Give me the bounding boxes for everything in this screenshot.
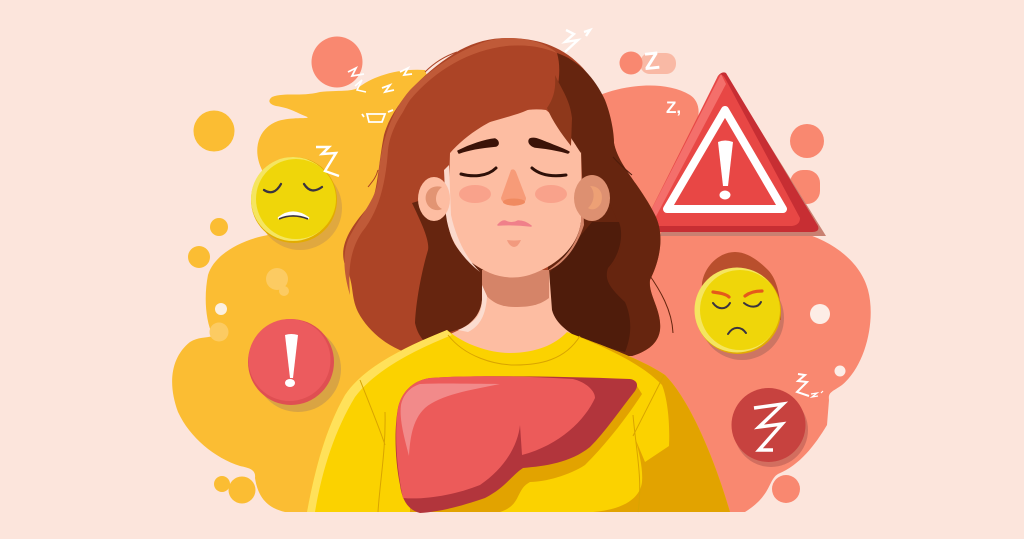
open box doodle	[367, 114, 385, 122]
cheek left	[459, 185, 491, 203]
circle: coral top left	[312, 36, 362, 88]
liver dark base	[396, 376, 637, 513]
hair: right dark side	[550, 53, 660, 356]
hair fringe	[384, 46, 558, 200]
zigzag z mark	[754, 404, 783, 450]
triangle inner outline	[667, 110, 783, 209]
collar stitch	[448, 335, 580, 365]
emoji mouth	[728, 328, 746, 334]
liver	[396, 376, 642, 513]
sleeve seams	[360, 375, 664, 512]
dots: pale highlights on yellow blob	[210, 268, 289, 342]
emoji mouth	[279, 213, 308, 218]
nose	[501, 169, 526, 206]
dots: white on coral blob	[810, 304, 846, 376]
badge: exclamation	[248, 319, 341, 412]
chin	[507, 240, 521, 247]
circle: yellow upper left	[194, 110, 234, 152]
letter Z top right: Z	[643, 47, 661, 76]
liver shadow	[410, 386, 642, 512]
eyebrow left	[458, 139, 498, 153]
triangle shadow	[660, 78, 826, 236]
hair back	[343, 38, 660, 356]
emoji: frowning with hair	[694, 252, 784, 360]
blob: coral background	[600, 86, 871, 512]
circle: yellow small lower	[188, 246, 210, 268]
liver main lobe	[396, 376, 595, 498]
face	[444, 109, 584, 277]
eye right	[532, 168, 566, 176]
badge shadow	[734, 393, 808, 467]
emoji eyes	[264, 184, 322, 192]
badge circle	[248, 319, 334, 405]
liver highlight	[401, 384, 500, 456]
neck shadow	[482, 270, 549, 307]
emoji face	[695, 268, 781, 354]
hair: left highlight edge	[344, 38, 557, 295]
hair fringe right	[547, 75, 572, 146]
sleep marks: top left	[348, 68, 412, 122]
cheek right	[535, 185, 567, 203]
emoji brows	[713, 291, 762, 297]
face side highlight	[444, 165, 480, 272]
ear right	[574, 175, 610, 221]
warning triangle	[645, 72, 826, 236]
zigzag: sleep mark near left emoji	[316, 147, 339, 176]
badge: sleep z	[732, 388, 808, 467]
exclamation mark	[285, 334, 298, 387]
circle: yellow small	[210, 218, 228, 236]
circles: coral right of triangle	[790, 124, 824, 204]
letter Z by triangle: Z,	[666, 98, 681, 117]
eye left	[461, 168, 496, 176]
eyebrow right	[529, 138, 569, 153]
shirt	[307, 330, 730, 512]
circles: yellow bottom pair	[214, 476, 256, 504]
emoji eyes	[713, 302, 761, 308]
badge circle	[732, 388, 806, 462]
emoji shadow	[700, 276, 784, 360]
triangle body	[645, 72, 818, 232]
emoji hair	[700, 252, 781, 320]
mouth	[498, 221, 531, 226]
circle: coral bottom right	[772, 475, 800, 503]
hair strands	[368, 52, 673, 333]
hair: inner shadow	[412, 195, 629, 352]
zigzag: sleep marks above badge	[797, 374, 823, 397]
emoji face	[251, 157, 337, 243]
shirt body	[307, 330, 730, 512]
badge shadow	[255, 326, 341, 412]
ear left	[418, 177, 450, 221]
zigzag: sleep mark top centre	[565, 30, 590, 52]
blob: yellow background	[172, 70, 470, 512]
circle: coral top right pair	[620, 52, 676, 74]
shirt shaded right side	[567, 332, 730, 512]
exclamation mark	[718, 140, 733, 200]
emoji shadow	[258, 166, 342, 250]
emoji: tired left	[251, 157, 342, 250]
shirt left highlight	[307, 330, 452, 512]
neck	[448, 270, 580, 372]
